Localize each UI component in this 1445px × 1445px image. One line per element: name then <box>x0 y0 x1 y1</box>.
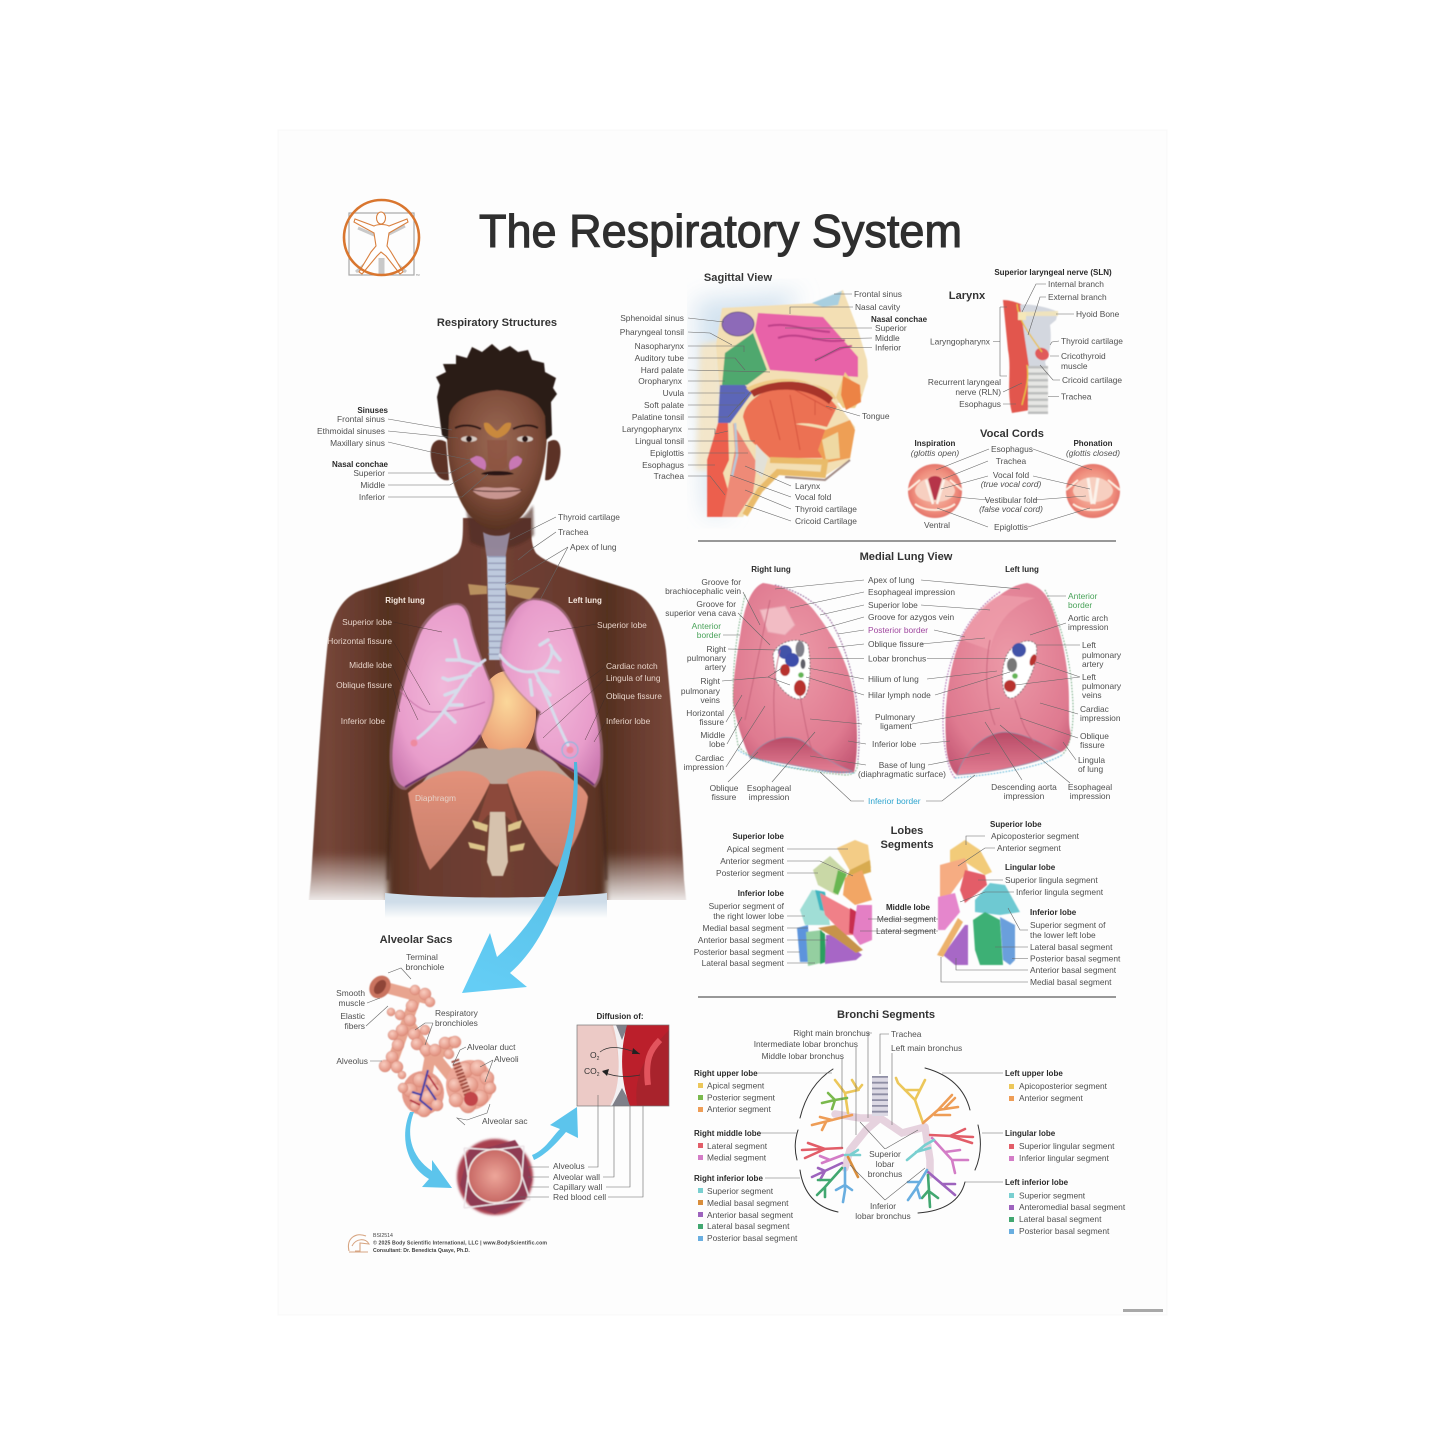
medial center labels: Hilium of lung <box>868 674 919 684</box>
alveolar labels: Terminal <box>406 952 438 962</box>
legend: right lobes: Posterior basal segment <box>707 1233 798 1243</box>
sagittal labels: Tongue <box>862 411 890 421</box>
footer credits: BSI2514 <box>373 1233 393 1239</box>
medial left column labels: lobe <box>709 739 725 749</box>
leader lines: alveolar <box>366 968 493 1125</box>
sagittal labels: Esophagus <box>642 460 684 470</box>
lobes labels: Posterior basal segment <box>1030 954 1121 964</box>
arrow: lung to alveolar sacs <box>462 762 578 993</box>
alveolar labels: Elastic <box>340 1011 365 1021</box>
larynx labels <box>928 268 1123 409</box>
medial center labels: Groove for azygos vein <box>868 612 954 622</box>
legend: left lobes: Apicoposterior segment <box>1019 1081 1108 1091</box>
diffusion box: 2 <box>597 1056 600 1062</box>
sinus labels: Trachea <box>558 527 589 537</box>
bronchi labels: lobar <box>876 1159 895 1169</box>
leader lines: vocal cords <box>936 449 1092 527</box>
medial left column labels: border <box>697 630 721 640</box>
medial left column labels: fissure <box>699 717 724 727</box>
medial left column labels: Cardiac <box>695 753 724 763</box>
bronchi labels: Superior <box>869 1149 901 1159</box>
logo: Vitruvian man <box>344 200 420 277</box>
sagittal labels: Laryngopharynx <box>622 424 683 434</box>
alveolar labels: Smooth <box>336 988 365 998</box>
heading: larynx: Larynx <box>949 290 986 302</box>
sinus labels: Ethmoidal sinuses <box>317 426 385 436</box>
alveolus labels: Red blood cell <box>553 1192 606 1202</box>
larynx labels: Cricoid cartilage <box>1062 375 1122 385</box>
bronchi labels: Middle lobar bronchus <box>762 1051 844 1061</box>
illustration: larynx <box>1003 300 1058 414</box>
lung labels on body: Inferior lobe <box>606 716 651 726</box>
lobes labels: Apicoposterior segment <box>991 831 1080 841</box>
footer credits <box>348 1233 547 1254</box>
bronchi labels: Left main bronchus <box>891 1043 962 1053</box>
medial right column labels: pulmonary <box>1082 681 1122 691</box>
sinus labels: Nasal conchae <box>332 460 389 469</box>
bronchi labels: Trachea <box>891 1029 922 1039</box>
lobes labels: Inferior lobe <box>1030 908 1077 917</box>
medial left column labels: veins <box>700 695 720 705</box>
medial left column labels: Groove for <box>701 577 741 587</box>
icon: glottis open <box>908 464 962 518</box>
lobes labels: Posterior segment <box>716 868 785 878</box>
larynx labels: External branch <box>1048 292 1107 302</box>
sagittal labels: Lingual tonsil <box>635 436 684 446</box>
diffusion box: CO <box>584 1066 597 1076</box>
medial left column labels <box>665 565 1039 802</box>
illustration: heart <box>478 671 536 759</box>
panel: respiratory structures <box>308 317 687 920</box>
illustration: trachea <box>483 532 510 660</box>
sinus labels: Maxillary sinus <box>330 438 385 448</box>
legend: right lobes: Right upper lobe <box>694 1069 758 1078</box>
vocal cords labels: (glottis open) <box>911 448 959 458</box>
lobes labels: Inferior lobe <box>738 889 785 898</box>
alveolar labels: Alveolus <box>336 1056 368 1066</box>
sagittal labels: Superior <box>875 323 907 333</box>
diffusion box <box>577 1012 669 1106</box>
larynx labels: Recurrent laryngeal <box>928 377 1001 387</box>
illustration: torso <box>308 518 687 920</box>
medial right column labels: Left <box>1082 672 1097 682</box>
leader lines: larynx <box>993 284 1074 404</box>
medial center labels: Hilar lymph node <box>868 690 931 700</box>
lobes labels: Medial segment <box>877 914 937 924</box>
larynx labels: Trachea <box>1061 392 1092 402</box>
illustration: alveolus cross section <box>457 1139 533 1215</box>
legend: right lobes: Right middle lobe <box>694 1129 762 1138</box>
barcode strip <box>1123 1309 1163 1312</box>
panel: alveolar sacs <box>336 934 669 1215</box>
sagittal labels: Uvula <box>663 388 684 398</box>
illustration: alveolar cluster <box>365 971 496 1117</box>
lobes labels: Medial basal segment <box>703 923 785 933</box>
medial center labels: Inferior border <box>868 796 921 806</box>
legend: right lobes: Medial basal segment <box>707 1198 789 1208</box>
medial right column labels: impression <box>1068 622 1109 632</box>
lobes labels: Superior segment of <box>1030 920 1106 930</box>
panel: vocal cords <box>908 428 1120 532</box>
lobes labels: Anterior basal segment <box>1030 965 1117 975</box>
medial right column labels: pulmonary <box>1082 650 1122 660</box>
medial right column labels: Oblique <box>1080 731 1109 741</box>
bronchi labels: Right main bronchus <box>793 1028 870 1038</box>
lobes labels: Lateral segment <box>876 926 937 936</box>
sagittal labels: Larynx <box>795 481 821 491</box>
sinus labels <box>317 406 620 552</box>
lobes labels: Apical segment <box>727 844 785 854</box>
heading: alveolar sacs: Alveolar Sacs <box>380 934 452 946</box>
vocal cords labels: Vestibular fold <box>985 495 1038 505</box>
legend: left lobes: Lateral basal segment <box>1019 1214 1102 1224</box>
alveolar labels: bronchiole <box>406 962 445 972</box>
leader lines: sagittal <box>688 294 872 521</box>
lung labels on body: Oblique fissure <box>606 691 662 701</box>
medial right column labels: of lung <box>1078 764 1103 774</box>
lobes labels: Superior segment of <box>709 901 785 911</box>
medial center labels: Lobar bronchus <box>868 654 926 664</box>
lobes labels: Lateral basal segment <box>702 958 785 968</box>
leader lines: body <box>388 419 568 600</box>
lobes labels: Superior lobe <box>732 832 785 841</box>
medial center labels: Inferior lobe <box>872 739 917 749</box>
medial right column labels: Lingula <box>1078 755 1105 765</box>
medial left column labels: artery <box>705 662 727 672</box>
medial left column labels: Groove for <box>696 599 736 609</box>
vocal cords labels: Vocal fold <box>993 470 1029 480</box>
illustration: left medial lung <box>943 583 1073 778</box>
vocal cords labels: Esophagus <box>991 444 1033 454</box>
medial left column labels: Oblique <box>710 783 739 793</box>
footer credits: © 2025 Body Scientific International, LLC | www.BodyScientific.com <box>373 1240 547 1246</box>
medial left column labels: Right <box>706 644 727 654</box>
chart: bronchial tree <box>795 1068 980 1213</box>
alveolus labels: Capillary wall <box>553 1182 602 1192</box>
medial left column labels: pulmonary <box>681 686 721 696</box>
legend: left lobes: Lingular lobe <box>1005 1129 1056 1138</box>
vocal cords labels: Phonation <box>1073 439 1113 448</box>
sagittal labels: Middle <box>875 333 900 343</box>
larynx labels: Superior laryngeal nerve (SLN) <box>994 268 1112 277</box>
heading: lobes segments: Lobes <box>891 825 923 837</box>
heading: bronchi segments: Bronchi Segments <box>837 1009 935 1021</box>
medial left column labels: brachiocephalic vein <box>665 586 741 596</box>
lung labels on body: Oblique fissure <box>336 680 392 690</box>
lung labels on body <box>327 596 662 803</box>
arrow: cluster to alveolus <box>405 1112 452 1188</box>
sinus labels: Thyroid cartilage <box>558 512 620 522</box>
medial right column labels: Anterior <box>1068 591 1098 601</box>
sinus labels: Frontal sinus <box>337 414 385 424</box>
medial left column labels: Right lung <box>751 565 791 574</box>
sagittal labels: Palatine tonsil <box>632 412 684 422</box>
legend: right lobes: Lateral segment <box>707 1141 768 1151</box>
alveolus labels: Alveolus <box>553 1161 585 1171</box>
sagittal labels: Nasal conchae <box>871 315 928 324</box>
larynx labels: Thyroid cartilage <box>1061 336 1123 346</box>
heading: medial lung view: Medial Lung View <box>860 551 953 563</box>
sagittal labels: Epiglottis <box>650 448 684 458</box>
larynx labels: muscle <box>1061 361 1088 371</box>
sagittal labels: Sphenoidal sinus <box>620 313 684 323</box>
medial left column labels: Anterior <box>692 621 721 631</box>
medial center labels: ligament <box>880 721 913 731</box>
medial right column labels: impression <box>1004 791 1045 801</box>
sagittal labels: Auditory tube <box>635 353 684 363</box>
illustration: neck and head <box>431 344 560 549</box>
medial center labels: Base of lung <box>879 760 926 770</box>
sinus labels: Sinuses <box>357 406 389 415</box>
sagittal labels: Pharyngeal tonsil <box>620 327 684 337</box>
sagittal labels: Cricoid Cartilage <box>795 516 857 526</box>
lung labels on body: Diaphragm <box>415 793 456 803</box>
illustration: left lobes <box>937 840 1020 965</box>
medial center labels: Superior lobe <box>868 600 918 610</box>
lung labels on body: Horizontal fissure <box>327 636 392 646</box>
legend: right lobes: Posterior segment <box>707 1092 776 1102</box>
lobes labels: Superior lingula segment <box>1005 875 1098 885</box>
diffusion box: 2 <box>597 1072 600 1078</box>
medial left column labels: superior vena cava <box>665 608 736 618</box>
heading: vocal cords: Vocal Cords <box>980 428 1044 440</box>
sagittal labels: Vocal fold <box>795 492 832 502</box>
medial right column labels: impression <box>1070 791 1111 801</box>
lung labels on body: Left lung <box>568 596 602 605</box>
leader lines: medial <box>722 580 1080 801</box>
medial right column labels: Descending aorta <box>991 782 1057 792</box>
medial right column labels: veins <box>1082 690 1102 700</box>
medial left column labels: pulmonary <box>687 653 727 663</box>
bronchi labels: bronchus <box>868 1169 902 1179</box>
vocal cords labels: (glottis closed) <box>1066 448 1120 458</box>
heading: sagittal view: Sagittal View <box>704 272 772 284</box>
illustration: sagittal head <box>696 290 868 517</box>
lobes labels: Medial basal segment <box>1030 977 1112 987</box>
heading: respiratory structures: Respiratory Structures <box>437 317 557 329</box>
illustration: right medial lung <box>733 583 859 775</box>
diffusion box: Diffusion of: <box>596 1012 644 1021</box>
legend: left lobes <box>1005 1069 1126 1236</box>
alveolar labels: Alveolar sac <box>482 1116 528 1126</box>
sinus labels: Inferior <box>359 492 385 502</box>
legend: right lobes: Superior segment <box>707 1186 774 1196</box>
sagittal labels: Trachea <box>654 471 684 481</box>
sagittal labels: Inferior <box>875 342 901 352</box>
medial center labels: (diaphragmatic surface) <box>858 769 946 779</box>
medial center labels: Pulmonary <box>875 712 916 722</box>
illustration: right lobes <box>797 840 872 966</box>
lung labels on body: Right lung <box>385 596 425 605</box>
legend: right lobes: Apical segment <box>707 1080 765 1090</box>
vocal cords labels: (true vocal cord) <box>981 479 1041 489</box>
lobes labels: the right lower lobe <box>713 911 784 921</box>
medial right column labels: border <box>1068 600 1092 610</box>
lung labels on body: Inferior lobe <box>341 716 385 726</box>
larynx labels: nerve (RLN) <box>955 387 1001 397</box>
larynx labels: Hyoid Bone <box>1076 309 1120 319</box>
lung labels on body: Cardiac notch <box>606 661 658 671</box>
legend: left lobes: Posterior basal segment <box>1019 1226 1110 1236</box>
icon: glottis closed <box>1066 464 1120 518</box>
illustration: diaphragm <box>408 771 588 876</box>
medial center labels: Apex of lung <box>868 575 915 585</box>
leader lines: lobes <box>787 836 1028 982</box>
sagittal labels: Frontal sinus <box>854 289 902 299</box>
logo: Vitruvian man: TM <box>416 274 420 277</box>
medial left column labels: impression <box>684 762 724 772</box>
lobes labels: Lateral basal segment <box>1030 942 1113 952</box>
alveolar labels <box>336 952 528 1126</box>
alveolus labels: Alveolar wall <box>553 1172 600 1182</box>
panel: bronchi segments <box>694 1009 1126 1243</box>
legend: left lobes: Left upper lobe <box>1005 1069 1063 1078</box>
vocal cords labels: Epiglottis <box>994 522 1028 532</box>
medial right column labels: Aortic arch <box>1068 613 1108 623</box>
larynx labels: Internal branch <box>1048 279 1104 289</box>
medial right column labels: fissure <box>1080 740 1105 750</box>
panel: larynx <box>928 268 1123 414</box>
leader lines: bronchi <box>756 1033 1003 1200</box>
medial center labels: Posterior border <box>868 625 928 635</box>
bronchi labels <box>754 1028 962 1221</box>
vocal cords labels: Ventral <box>924 520 950 530</box>
medial left column labels: Horizontal <box>686 708 724 718</box>
lobes labels: the lower left lobe <box>1030 930 1096 940</box>
vocal cords labels: (false vocal cord) <box>979 504 1043 514</box>
illustration: central tendon <box>420 748 578 790</box>
lobes labels: Posterior basal segment <box>694 947 785 957</box>
legend: left lobes: Superior lingular segment <box>1019 1141 1115 1151</box>
lung labels on body: Middle lobe <box>349 660 392 670</box>
larynx labels: Cricothyroid <box>1061 351 1106 361</box>
illustration: right lung <box>390 603 494 790</box>
lung labels on body: Superior lobe <box>597 620 647 630</box>
lobes labels: Lingular lobe <box>1005 863 1056 872</box>
vocal cords labels <box>911 439 1120 532</box>
legend: left lobes: Anterior segment <box>1019 1093 1083 1103</box>
lung labels on body: Lingula of lung <box>606 673 661 683</box>
medial left column labels: Left lung <box>1005 565 1039 574</box>
sagittal labels <box>620 289 928 526</box>
alveolar labels: fibers <box>345 1021 365 1031</box>
sagittal labels: Oropharynx <box>638 376 683 386</box>
medial left column labels: impression <box>749 792 790 802</box>
heading line two: Segments <box>880 839 934 851</box>
diffusion box: O <box>590 1050 597 1060</box>
medial right column labels: impression <box>1080 713 1121 723</box>
larynx labels: Laryngopharynx <box>930 336 991 346</box>
medial left column labels: fissure <box>712 792 737 802</box>
legend: right lobes: Anterior basal segment <box>707 1210 794 1220</box>
lobes labels: Inferior lingula segment <box>1016 887 1104 897</box>
legend: right lobes: Lateral basal segment <box>707 1221 790 1231</box>
sinus labels: Apex of lung <box>570 542 617 552</box>
medial left column labels: Right <box>700 676 721 686</box>
lung labels on body: Superior lobe <box>342 617 392 627</box>
panel: medial lung view <box>665 551 1122 806</box>
legend: right lobes <box>694 1069 798 1243</box>
lobes labels: Anterior segment <box>997 843 1061 853</box>
medial left column labels: Middle <box>700 730 725 740</box>
medial right column labels: Left <box>1082 640 1097 650</box>
bronchi labels: lobar bronchus <box>855 1211 911 1221</box>
alveolar labels: bronchioles <box>435 1018 478 1028</box>
legend: right lobes: Anterior segment <box>707 1104 771 1114</box>
leader lines: diffusion <box>520 1095 643 1197</box>
panel: lobes segments <box>694 820 1121 987</box>
legend: right lobes: Right inferior lobe <box>694 1174 763 1183</box>
lobes labels: Anterior segment <box>720 856 785 866</box>
sagittal labels: Thyroid cartilage <box>795 504 857 514</box>
legend: left lobes: Left inferior lobe <box>1005 1178 1069 1187</box>
title: The Respiratory System <box>479 205 962 257</box>
alveolar labels: Alveoli <box>494 1054 519 1064</box>
legend: right lobes: Medial segment <box>707 1152 767 1162</box>
vocal cords labels: Inspiration <box>915 439 956 448</box>
sagittal labels: Hard palate <box>641 365 684 375</box>
sagittal labels: Nasopharynx <box>635 341 685 351</box>
sagittal labels: Soft palate <box>644 400 684 410</box>
lobes labels: Superior lobe <box>990 820 1042 829</box>
lobes labels <box>694 820 1121 987</box>
legend: left lobes: Inferior lingular segment <box>1019 1153 1110 1163</box>
medial right column labels: Esophageal <box>1068 782 1112 792</box>
alveolar labels: Alveolar duct <box>467 1042 516 1052</box>
lobes labels: Middle lobe <box>886 903 931 912</box>
alveolar labels: Respiratory <box>435 1008 479 1018</box>
medial right column labels: artery <box>1082 659 1104 669</box>
medial left column labels: Esophageal <box>747 783 791 793</box>
alveolar labels: muscle <box>338 998 365 1008</box>
footer credits: Consultant: Dr. Benedicta Quaye, Ph.D. <box>373 1248 470 1254</box>
illustration: left lung <box>500 598 603 788</box>
medial center labels <box>858 575 955 806</box>
vocal cords labels: Trachea <box>996 456 1027 466</box>
medial right column labels <box>991 591 1122 801</box>
lobes labels: Anterior basal segment <box>698 935 785 945</box>
bronchi labels: Inferior <box>870 1201 896 1211</box>
medial center labels: Oblique fissure <box>868 639 924 649</box>
poster sheet <box>278 130 1167 1315</box>
alveolus labels <box>553 1161 606 1202</box>
larynx labels: Esophagus <box>959 399 1001 409</box>
legend: left lobes: Superior segment <box>1019 1190 1086 1200</box>
sagittal labels: Nasal cavity <box>855 302 901 312</box>
bronchi labels: Intermediate lobar bronchus <box>754 1039 858 1049</box>
arrow: alveolus to diffusion <box>532 1107 578 1160</box>
medial right column labels: Cardiac <box>1080 704 1109 714</box>
sinus labels: Superior <box>353 468 385 478</box>
legend: left lobes: Anteromedial basal segment <box>1019 1202 1126 1212</box>
medial center labels: Esophageal impression <box>868 587 955 597</box>
sinus labels: Middle <box>360 480 385 490</box>
panel: sagittal view <box>620 272 928 526</box>
